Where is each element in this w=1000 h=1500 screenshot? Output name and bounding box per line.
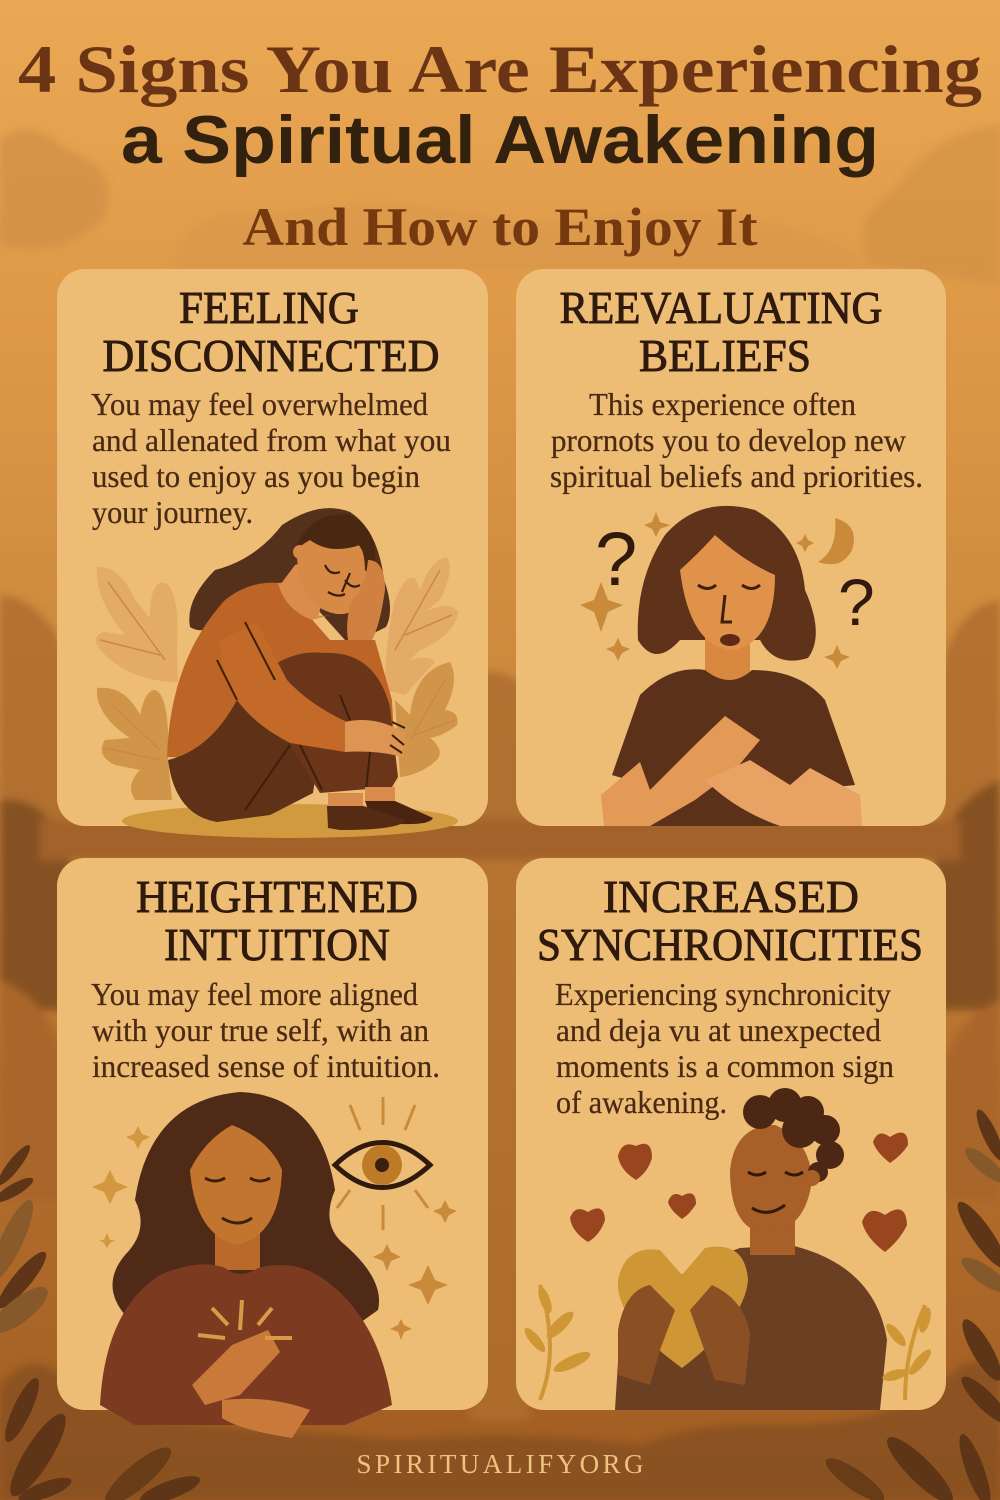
- text: heightened intuition: with your true self, with an: [92, 1012, 429, 1048]
- text: increased synchronicities: Experiencing synchronicity: [555, 976, 891, 1012]
- heading: reevaluating beliefs: [560, 282, 882, 381]
- heading: reevaluating beliefs: REEVALUATING: [560, 282, 882, 333]
- text: increased synchronicities: moments is a common sign: [556, 1048, 894, 1084]
- foliage: bottom right: [821, 1107, 1000, 1500]
- text: increased synchronicities: and deja vu at unexpected: [556, 1012, 881, 1048]
- panel: feeling disconnected: [57, 269, 488, 838]
- illustration: man holding heart: [522, 1088, 934, 1410]
- title: a Spiritual Awakening: [121, 102, 879, 178]
- text: feeling disconnected: and allenated from what you: [92, 422, 451, 458]
- illustration: woman hugging knees: [96, 508, 458, 838]
- text: feeling disconnected: You may feel overwhelmed: [91, 386, 428, 422]
- illustration: woman with eye: [92, 1092, 457, 1438]
- heading: heightened intuition: INTUITION: [164, 919, 390, 970]
- text: heightened intuition: increased sense of intuition.: [92, 1048, 440, 1084]
- heading: reevaluating beliefs: BELIEFS: [639, 330, 811, 381]
- heading: heightened intuition: [136, 871, 418, 970]
- footer: SPIRITUALIFYORG: [356, 1449, 644, 1479]
- text: reevaluating beliefs: [550, 386, 923, 494]
- text: heightened intuition: [91, 976, 440, 1084]
- panel: increased synchronicities: [516, 858, 946, 1410]
- illustration: woman with questions: [580, 506, 875, 826]
- heading: heightened intuition: HEIGHTENED: [136, 871, 418, 922]
- panel: reevaluating beliefs: [516, 269, 946, 826]
- heading: increased synchronicities: INCREASED: [603, 871, 859, 922]
- heading: feeling disconnected: FEELING: [179, 282, 359, 333]
- heading: feeling disconnected: [102, 282, 440, 381]
- panel: heightened intuition: [57, 858, 488, 1438]
- text: increased synchronicities: of awakening.: [556, 1084, 727, 1120]
- heading: increased synchronicities: SYNCHRONICITIES: [537, 919, 923, 970]
- foliage: bottom left: [0, 1142, 203, 1500]
- text: feeling disconnected: used to enjoy as you begin: [92, 458, 420, 494]
- title: [18, 31, 982, 257]
- illustration: woman with questions: ?: [838, 565, 875, 639]
- text: feeling disconnected: your journey.: [92, 494, 253, 530]
- text: reevaluating beliefs: This experience often: [589, 386, 856, 422]
- title: 4 Signs You Are Experiencing: [18, 31, 982, 107]
- text: heightened intuition: You may feel more aligned: [91, 976, 418, 1012]
- text: reevaluating beliefs: spiritual beliefs and priorities.: [550, 458, 923, 494]
- text: feeling disconnected: [91, 386, 451, 530]
- illustration: woman with questions: ?: [595, 517, 637, 602]
- heading: increased synchronicities: [537, 871, 923, 970]
- text: increased synchronicities: [555, 976, 894, 1120]
- heading: feeling disconnected: DISCONNECTED: [102, 330, 440, 381]
- title: And How to Enjoy It: [242, 197, 758, 257]
- text: reevaluating beliefs: prornots you to develop new: [551, 422, 906, 458]
